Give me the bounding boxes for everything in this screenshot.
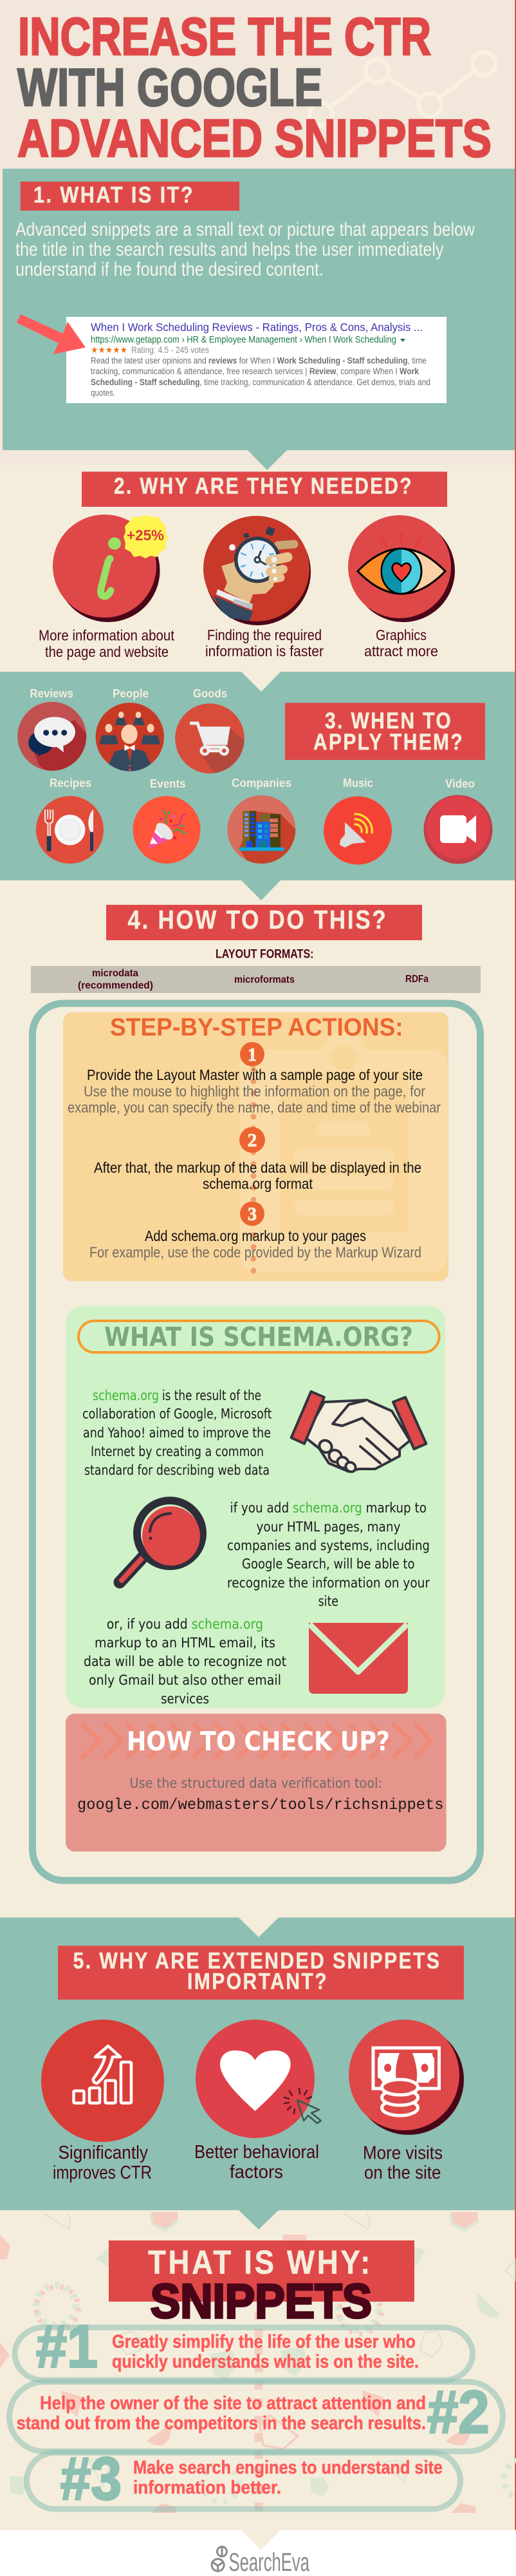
icon: stopwatch in hand: [203, 516, 311, 625]
header background: [0, 0, 516, 465]
icon: events party popper: ★: [172, 835, 178, 842]
icon: handshake: [291, 1392, 426, 1474]
definition text: understand if he found the desired content.: [15, 259, 324, 280]
label: better behavioral factors: [194, 2142, 319, 2183]
icon: information with +25%: [53, 515, 168, 622]
step 2 badge: 2: [248, 1130, 257, 1151]
heading: that is why: THAT IS WHY:: [148, 2244, 373, 2281]
heading: why important: IMPORTANT?: [187, 1969, 328, 1994]
icon: envelope: [309, 1623, 408, 1694]
step 1 badge: 1: [248, 1045, 257, 1065]
label: more information: More information about: [39, 627, 175, 644]
text: markup for html email: markup to an HTML email, its: [95, 1635, 275, 1651]
arrow: [17, 314, 86, 354]
reason 2: Help the owner of the site to attract attention and: [40, 2393, 426, 2414]
text: schema.org collaboration: Internet by creating a common: [91, 1444, 264, 1460]
search result snippet example: tracking, communication & attendance, free research services | Review, compare When I Work: [91, 366, 419, 376]
label: finding information: Finding the required: [207, 627, 322, 643]
icon labels: bottom row: Events: [150, 777, 185, 790]
step 1 text: example, you can specify the name, date and time of the webinar: [68, 1099, 441, 1115]
layout formats bar: microformats: [234, 974, 295, 985]
text: markup for html email: services: [161, 1691, 209, 1707]
panel: that is why: [0, 2210, 516, 2513]
icon: recipes plate and cutlery: [36, 796, 104, 864]
icon: people: [96, 703, 164, 772]
decorative clipboard: [240, 1032, 448, 1273]
heading: when to apply: APPLY THEM?: [313, 729, 464, 755]
step 2 text: [94, 1159, 421, 1192]
reason 3: [27, 2445, 461, 2512]
rounded frame: [32, 1003, 480, 1880]
icon labels: top row: Reviews: [30, 687, 73, 700]
icon: music speaker: [324, 796, 392, 864]
icon labels: bottom row: Companies: [232, 776, 291, 790]
label: more visits: More visits: [363, 2143, 443, 2164]
text: markup for html email: data will be able to recognize not: [84, 1654, 286, 1670]
panel: why are they needed: [39, 471, 455, 660]
text: schema.org collaboration: [82, 1388, 272, 1479]
label: improves CTR: improves CTR: [53, 2163, 152, 2183]
icon labels: bottom row: Recipes: [50, 776, 91, 790]
dotted connector: [251, 1069, 256, 1273]
panel: why are extended snippets important: [0, 1918, 515, 2210]
label: more visits: [363, 2143, 443, 2183]
step 3 text: [89, 1227, 421, 1261]
decorative chevrons: [82, 1723, 430, 1758]
arrow: cream pointer to footer: [241, 2530, 281, 2550]
label: finding information: [205, 627, 324, 659]
title: [17, 6, 492, 168]
icon labels: top row: Goods: [193, 687, 227, 700]
arrow: teal pointer: [248, 450, 287, 470]
reason 1: Greatly simplify the life of the user who: [112, 2331, 416, 2352]
icon labels: bottom row: Music: [343, 776, 373, 790]
step 1 text: Use the mouse to highlight the information on the page, for: [84, 1083, 425, 1100]
step 3 text: For example, use the code provided by the Markup Wizard: [89, 1244, 421, 1261]
text: tool url: google.com/webmasters/tools/richsnippets: [77, 1797, 444, 1814]
heading: when to apply: 3. WHEN TO: [325, 708, 452, 734]
reason 3: #3: [60, 2445, 122, 2512]
icon: growth chart: [41, 2020, 164, 2142]
text: markup for html email: only Gmail but also other email: [89, 1672, 281, 1689]
icon labels: bottom row: [50, 776, 475, 790]
step 2 text: After that, the markup of the data will be displayed in the: [94, 1159, 421, 1176]
panel: what is schema.org: [66, 1306, 445, 1708]
icon: video camera: [423, 795, 493, 864]
label: improves CTR: Significantly: [58, 2143, 148, 2163]
label: more information: the page and website: [45, 643, 169, 660]
text: schema.org collaboration: and Yahoo! aimed to improve the: [83, 1425, 271, 1441]
arrow: cream pointer: [241, 672, 281, 692]
arrow: cream pointer: [239, 1918, 279, 1937]
search result snippet example: https://www.getapp.com › HR & Employee Management › When I Work Scheduling: [91, 335, 396, 345]
reason 1: [15, 2313, 472, 2380]
panel: how to check up: [66, 1714, 447, 1852]
text: markup for html pages: site: [318, 1594, 338, 1610]
definition text: the title in the search results and helps the user immediately: [15, 239, 444, 260]
heading: that is why: [109, 2240, 414, 2302]
icon labels: top row: [30, 687, 227, 700]
text: schema.org collaboration: is the result of the: [162, 1388, 261, 1404]
heading: why needed: 2. WHY ARE THEY NEEDED?: [114, 473, 413, 498]
text: markup for html pages: companies and systems, including: [227, 1538, 430, 1554]
icon: eye with heart: [348, 515, 455, 622]
heading: step-by-step: STEP-BY-STEP ACTIONS:: [110, 1014, 403, 1041]
reason 3: information better.: [133, 2477, 281, 2498]
step 3 badge: [240, 1202, 264, 1226]
label: graphics attract: Graphics: [376, 627, 427, 643]
definition text: [15, 219, 475, 280]
heading: when to apply: [285, 703, 485, 760]
label: better behavioral factors: factors: [230, 2162, 283, 2183]
right edge line: [515, 0, 516, 2530]
reason 3: Make search engines to understand site: [133, 2458, 443, 2478]
reason 1: quickly understands what is on the site.: [112, 2351, 419, 2372]
heading: how to check up: HOW TO CHECK UP?: [127, 1726, 390, 1757]
icon: money and coins: [349, 2020, 464, 2135]
icon: companies buildings: [227, 795, 296, 864]
step 1 text: Provide the Layout Master with a sample page of your site: [87, 1066, 423, 1083]
search result snippet example: ★★★★★: [91, 345, 127, 355]
background pattern: [0, 2212, 516, 2513]
heading: why important: [58, 1946, 464, 2000]
icon: events party popper: [133, 796, 201, 864]
text: markup for html pages: recognize the information on your: [227, 1575, 430, 1591]
icon: information with +25%: +25%: [127, 527, 164, 544]
text: verification tool: Use the structured data verification tool:: [130, 1776, 382, 1791]
layout formats bar: microdata: [92, 968, 138, 979]
layout formats bar: (recommended): [78, 980, 153, 991]
heading pill: what is schema.org: WHAT IS SCHEMA.ORG?: [104, 1321, 413, 1352]
title: WITH GOOGLE: [17, 57, 322, 117]
text: markup for html pages: if you add schema.org markup to: [230, 1501, 427, 1517]
footer logo: SearchEva: [212, 2546, 309, 2576]
search result snippet example: Rating: 4.5 - 245 votes: [131, 345, 209, 355]
icon: goods shopping cart: [175, 703, 246, 776]
layout formats bar: [31, 966, 481, 993]
text: schema.org collaboration: schema.org: [93, 1388, 159, 1404]
text: markup for html email: or, if you add schema.org: [107, 1616, 263, 1633]
footer logo: SearchEva: SearchEva: [229, 2548, 309, 2576]
panel: how to do this: [31, 905, 481, 1880]
label: more information: [39, 627, 175, 660]
reason 2: stand out from the competitors in the search results.: [17, 2413, 426, 2434]
step 1 text: [68, 1066, 441, 1115]
arrow: teal pointer to section 4: [241, 880, 281, 900]
text: markup for html email: [84, 1616, 286, 1707]
label: improves CTR: [53, 2143, 152, 2183]
reason 2: [9, 2378, 503, 2451]
search result snippet example: When I Work Scheduling Reviews - Ratings, Pros & Cons, Analysis ...: [91, 321, 423, 334]
step 3 badge: 3: [248, 1204, 257, 1225]
step 1 badge: [240, 1042, 264, 1066]
search result snippet example: [66, 317, 447, 403]
layout formats label: LAYOUT FORMATS:: [216, 947, 314, 961]
step 2 text: schema.org format: [203, 1175, 313, 1192]
label: more visits: on the site: [364, 2163, 441, 2183]
label: better behavioral factors: Better behavioral: [194, 2142, 319, 2163]
dashed center line: [255, 2311, 263, 2512]
heading: why important: 5. WHY ARE EXTENDED SNIPPETS: [73, 1947, 441, 1973]
search result snippet example: quotes.: [91, 388, 115, 398]
step 2 badge: [239, 1127, 265, 1153]
layout formats bar: RDFa: [405, 974, 428, 985]
panel: what is it: [3, 169, 515, 450]
icon: heart and cursor: [196, 2020, 321, 2138]
reason 2: #2: [427, 2378, 490, 2446]
step 3 text: Add schema.org markup to your pages: [145, 1227, 366, 1244]
icon: events party popper: ★: [171, 812, 178, 820]
text: markup for html pages: your HTML pages, many: [256, 1519, 401, 1535]
text: schema.org collaboration: collaboration of Google, Microsoft: [82, 1406, 272, 1422]
panel: step-by-step actions: [63, 1012, 448, 1282]
heading: how to do this: 4. HOW TO DO THIS?: [127, 905, 387, 934]
text: schema.org collaboration: standard for describing web data: [84, 1463, 270, 1479]
heading: what is it: 1. WHAT IS IT?: [33, 182, 194, 207]
reason 1: #1: [36, 2313, 98, 2380]
text: markup for html pages: [227, 1501, 430, 1610]
search result snippet example: Scheduling - Staff scheduling, time tracking, communication & attendance. Get demos, trials and: [91, 377, 430, 387]
heading: why needed: [82, 471, 447, 507]
icon labels: top row: People: [113, 687, 149, 700]
icon: reviews speech bubbles: [17, 702, 86, 771]
panel: when to apply them: [0, 672, 515, 880]
label: graphics attract: attract more: [364, 643, 438, 659]
heading: snippets: SNIPPETS: [151, 2274, 372, 2328]
decorative line chart: [309, 52, 495, 126]
icon: magnifying glass: [120, 1501, 203, 1582]
search result snippet example: Read the latest user opinions and reviews for When I Work Scheduling - Staff scheduling, time: [91, 355, 427, 366]
label: finding information: information is faster: [205, 643, 324, 659]
arrow: teal pointer: [239, 2210, 279, 2230]
label: graphics attract: [364, 627, 438, 659]
icon labels: bottom row: Video: [445, 777, 475, 790]
text: markup for html pages: Google Search, will be able to: [242, 1556, 414, 1573]
